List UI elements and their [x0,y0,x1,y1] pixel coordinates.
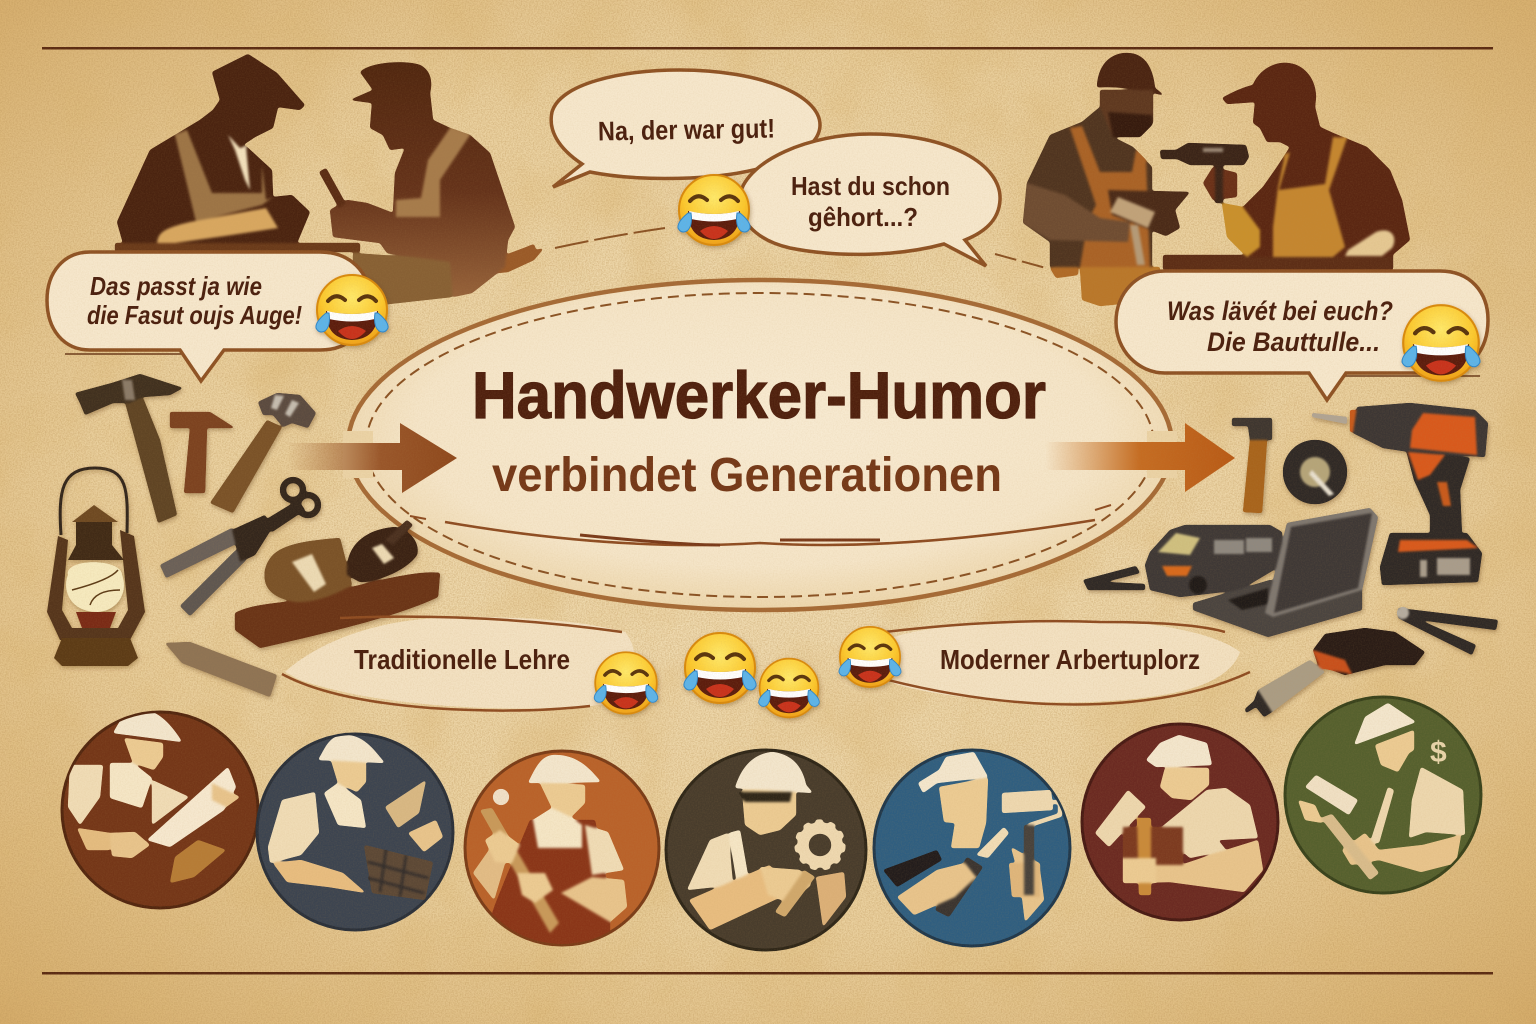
speech bubble: right [1116,271,1488,400]
title: Handwerker-Humor [472,358,1046,432]
title [472,358,1046,502]
arm gap [1345,230,1394,256]
subtitle: verbindet Generationen [492,449,1002,502]
arrow: right [1045,423,1235,492]
worker three hat and face [1088,53,1165,137]
icon: disc [1283,440,1347,504]
label ribbon: Moderner Arbeitsplatz [885,621,1250,704]
icon: carpenter pencil [165,642,277,697]
icon: small hammer [170,412,235,493]
speech bubble: left: die Fasut oujs Auge! [87,300,302,330]
modern tools group [1083,403,1498,717]
speech bubble: right: Was lävét bei euch? [1167,296,1393,326]
worker four [1222,63,1410,257]
icon: toy car [1313,628,1425,675]
worker one [117,54,310,243]
label ribbon: Moderner Arbeitsplatz: Moderner Arbertuplorz [940,644,1200,675]
speech bubble: left [47,252,370,381]
medallion: bricklayer [257,734,453,930]
chisel [319,168,346,208]
dollar symbol: $ [1430,736,1447,769]
emoji: left bubble [316,275,388,345]
label ribbon: Traditionelle Lehre: Traditionelle Lehre [354,644,570,675]
worker three arm and tablet [1023,183,1190,265]
worker one apron [157,130,278,243]
medallion: mason with trowel [1082,724,1278,920]
speech bubble: Na, der war gut: Na, der war gut! [598,113,775,147]
worker three [1023,92,1152,267]
worker four arm [1222,203,1260,257]
speech bubble: left: Das passt ja wie [90,271,262,301]
emoji: right bubble [1402,305,1480,381]
label ribbon: Traditionelle Lehre [282,617,635,711]
worker three apron [1070,126,1150,267]
medallion: plasterer with brush [1285,697,1481,893]
central oval panel [343,280,1177,610]
worker two apron [396,128,470,217]
old tools group [75,374,440,697]
icon: ball hammer [210,393,316,513]
bench and box [115,243,544,305]
icon: folding tool [1083,566,1145,590]
bench and box [1050,255,1393,306]
icon: van [1145,525,1282,597]
speech bubble: right: Die Bauttulle... [1207,327,1380,357]
icon: hammer small [1232,418,1272,513]
icon: oil lantern [47,468,145,666]
icon: studded roller [1245,660,1325,717]
worker two [330,62,515,297]
emoji [759,659,819,717]
icon: cordless drill [1312,403,1488,585]
drill in hand [1160,143,1249,203]
emoji: top centre [678,175,750,245]
icon: right pliers [1397,607,1498,655]
medallion: carpenter with saw [62,710,258,908]
icon: pliers [160,480,318,616]
emoji row [594,627,901,717]
speech bubble: Hast du schon gehört: gêhort...? [808,202,918,232]
silhouette: traditional craftsmen [115,54,544,305]
icon: wood plane on log [235,520,440,648]
icon: laptop [1193,508,1378,637]
emoji [684,633,756,703]
icon: pick hammer [75,374,183,523]
silhouette: modern craftsmen [1023,53,1410,306]
dashed link lines to bubbles [65,228,1480,376]
speech bubble: Hast du schon gehört [739,134,1000,266]
emoji [839,627,901,687]
decorative swash [445,520,1095,545]
medallion: mechanic with wrench [465,751,659,950]
speech bubble: Na, der war gut [551,70,820,187]
emoji [594,652,658,714]
medallion: painter with roller [874,750,1070,946]
arrow: left [287,423,457,493]
speech bubble: Hast du schon gehört: Hast du schon [791,171,950,201]
medallion: machinist with gear [666,750,866,950]
worker four apron [1273,137,1347,257]
